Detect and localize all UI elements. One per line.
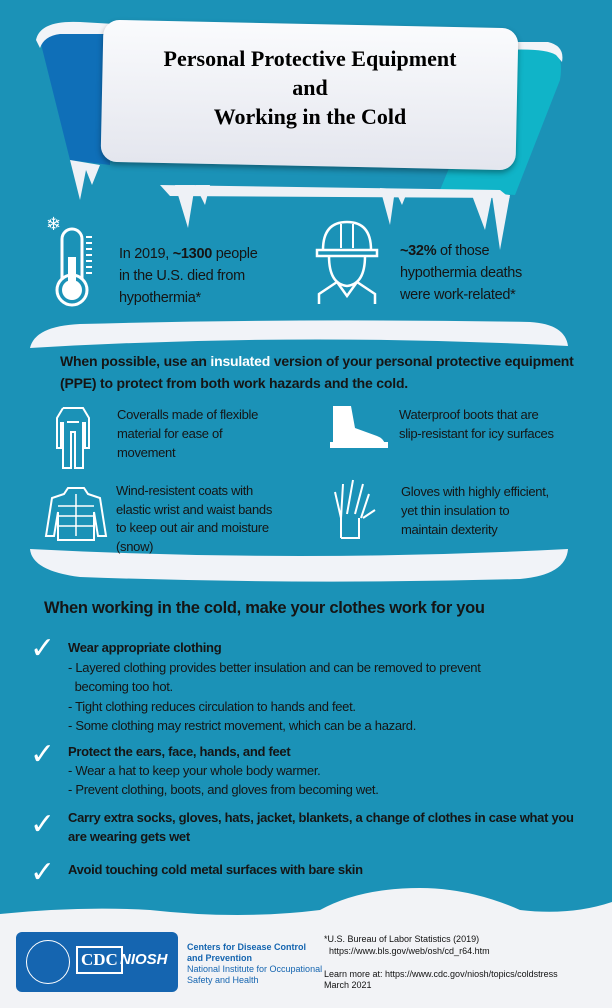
item 2: - Prevent clothing, boots, and gloves from becoming wet. (68, 782, 379, 797)
stat: deaths (119, 246, 258, 306)
text: boots: Waterproof boots that are (399, 407, 538, 422)
heading: clothes: When working in the cold, make your clothes work for you (44, 599, 485, 617)
title (164, 46, 456, 129)
snow band bottom (30, 549, 568, 582)
item 2: - Wear a hat to keep your whole body warmer. (68, 763, 320, 778)
item 4: Avoid touching cold metal surfaces with bare skin (68, 862, 363, 877)
item 1 (68, 640, 481, 733)
item 1: becoming too hot. (75, 679, 173, 694)
text: gloves (401, 484, 549, 537)
icon: coveralls (56, 407, 90, 469)
stat: work-related: were work-related* (400, 287, 515, 303)
agency name: Centers for Disease Control (187, 942, 306, 952)
sources (324, 934, 558, 990)
checkmarks: ✓ (30, 856, 55, 889)
footer snow (0, 888, 612, 1008)
item 1: - Layered clothing provides better insulation and can be removed to prevent (68, 660, 481, 674)
text: coats: (snow) (116, 538, 153, 554)
text: coats (116, 483, 272, 554)
item 2: Protect the ears, face, hands, and feet (68, 744, 290, 759)
icon: thermometer (46, 214, 92, 306)
checkmarks (30, 632, 55, 889)
stat: deaths: in the U.S. died from (119, 268, 245, 284)
text: coveralls (117, 407, 258, 460)
text: coats: Wind-resistent coats with (116, 483, 253, 498)
agency name: National Institute for Occupational (187, 964, 322, 974)
header decoration (36, 22, 562, 250)
item 2 (68, 744, 379, 797)
text: coats: to keep out air and moisture (116, 520, 269, 535)
text: coveralls: Coveralls made of flexible (117, 407, 258, 422)
checkmarks: ✓ (30, 738, 55, 771)
icon: worker hardhat (316, 220, 378, 304)
title card (101, 20, 518, 170)
title: Personal Protective Equipment (164, 46, 456, 71)
stat: work-related (400, 243, 522, 303)
checklist (30, 632, 574, 889)
sources: *U.S. Bureau of Labor Statistics (2019) (324, 934, 479, 944)
stat: work-related: ~32% of those (400, 243, 489, 259)
sources: March 2021 (324, 980, 372, 990)
ppe intro: When possible, use an insulated version of your personal protective equipment (PPE) to protect from both work hazards and the cold. (60, 353, 574, 391)
logo block (16, 932, 178, 992)
sources: https://www.bls.gov/web/osh/cd_r64.htm (329, 946, 490, 956)
stat: deaths: hypothermia* (119, 290, 201, 306)
icon: boot (330, 406, 388, 448)
stat: deaths: In 2019, ~1300 people (119, 246, 257, 262)
snow band top (30, 320, 568, 348)
title: and (292, 75, 328, 100)
title: Working in the Cold (214, 104, 406, 129)
checkmarks: ✓ (30, 808, 55, 841)
item 1: - Some clothing may restrict movement, which can be a hazard. (68, 718, 416, 733)
checkmarks: ✓ (30, 632, 55, 665)
logo block: CDC (81, 950, 118, 969)
icon: thermometer: ❄ (46, 214, 61, 234)
logo block: NIOSH (120, 951, 168, 968)
text: gloves: maintain dexterity (401, 522, 497, 537)
stat: work-related: hypothermia deaths (400, 265, 522, 281)
item 1: Wear appropriate clothing (68, 640, 221, 655)
sources: Learn more at: https://www.cdc.gov/niosh/topics/coldstress (324, 968, 558, 978)
item 1: - Tight clothing reduces circulation to hands and feet. (68, 698, 356, 714)
text: coats: elastic wrist and waist bands (116, 502, 272, 516)
icon: gloves (334, 480, 376, 539)
text: coveralls: movement (117, 445, 175, 460)
icon: coat (44, 487, 108, 541)
text: boots: slip-resistant for icy surfaces (399, 426, 554, 441)
text: boots (399, 407, 554, 441)
text: gloves: yet thin insulation to (401, 503, 509, 518)
text: gloves: Gloves with highly efficient, (401, 484, 549, 499)
agency name: and Prevention (187, 953, 252, 963)
agency name (187, 942, 322, 985)
item 3: Carry extra socks, gloves, hats, jacket, blankets, a change of clothes in case what you are wearing gets wet (68, 810, 574, 844)
text: coveralls: material for ease of (117, 426, 222, 441)
agency name: Safety and Health (187, 975, 259, 985)
